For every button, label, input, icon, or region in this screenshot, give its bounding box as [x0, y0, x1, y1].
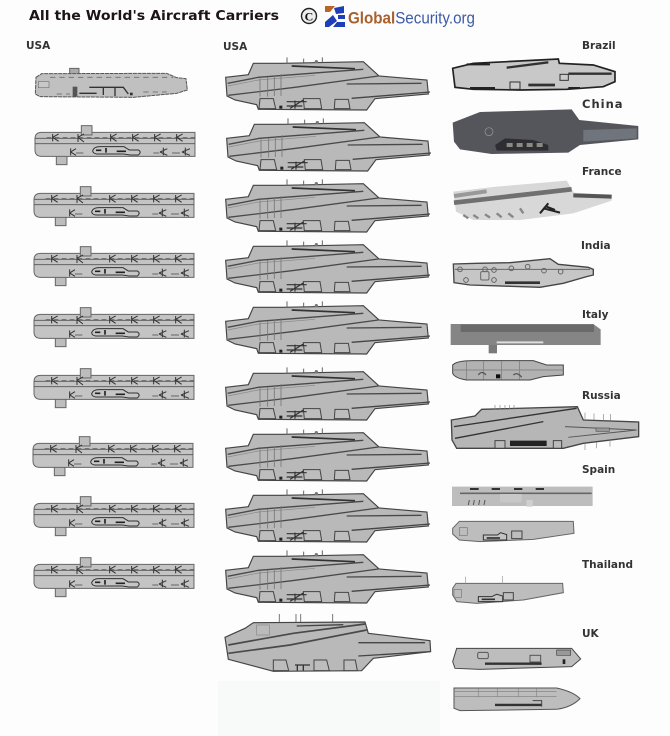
country label: France: France [582, 166, 622, 178]
logo wordmark: GlobalSecurity.org [348, 10, 475, 28]
carrier: Brazil [453, 59, 615, 90]
carrier: deck row 5 [34, 308, 194, 347]
carrier: deck row 2 [35, 126, 195, 165]
carrier: deck row 7 [33, 437, 193, 476]
carrier: centre row 1 [226, 57, 430, 110]
carrier: China [453, 109, 638, 154]
carrier: centre row 6 [226, 367, 430, 420]
carrier: Russia [451, 405, 639, 450]
carrier: centre row 3 [226, 179, 430, 232]
carrier: Thailand [453, 576, 563, 603]
carrier: older USA deck [35, 68, 187, 97]
carrier: deck row 9 [34, 558, 194, 597]
carrier: centre row 2 [227, 118, 431, 171]
country label: Spain: Spain [582, 464, 615, 476]
icon: copyright symbol [302, 8, 316, 24]
carrier: centre row 4 [226, 240, 430, 293]
carrier: UK lower [454, 688, 580, 711]
label: USA centre column: USA [223, 41, 248, 53]
country label: Russia: Russia [582, 390, 621, 402]
carrier: Italy upper [451, 324, 601, 353]
centre column: USA carriers [225, 57, 431, 671]
logo: GlobalSecurity.org [325, 6, 475, 28]
carrier: Spain upper [452, 487, 593, 507]
carrier: UK upper [453, 648, 581, 669]
label: USA left column: USA [26, 40, 51, 52]
country label: China: China [582, 97, 624, 111]
icon: logo mark [325, 6, 345, 27]
blank panel under centre column [218, 681, 440, 736]
carrier: India [453, 259, 593, 287]
carrier: Italy lower [453, 361, 563, 380]
country label: UK: UK [582, 628, 600, 640]
carrier: France [453, 181, 612, 220]
country label: Brazil: Brazil [582, 40, 616, 52]
carrier: deck row 3 [34, 187, 194, 226]
country label: India: India [581, 240, 611, 252]
carrier: deck row 8 [34, 497, 194, 536]
carrier: deck row 4 [34, 247, 194, 286]
right column: other navies [451, 40, 639, 711]
carrier: centre row 10 [225, 614, 431, 671]
left column: USA carriers [33, 68, 195, 597]
carrier: deck row 6 [34, 369, 194, 408]
title: All the World's Aircraft Carriers [29, 8, 279, 24]
icon: copyright symbol: C [305, 10, 313, 24]
country label: Thailand: Thailand [582, 559, 633, 571]
carrier: centre row 7 [226, 428, 430, 481]
carrier: centre row 5 [226, 301, 430, 354]
country label: Italy: Italy [582, 309, 609, 321]
carrier: Spain lower [453, 521, 574, 542]
carrier: centre row 8 [226, 489, 430, 542]
carrier: centre row 9 [226, 550, 430, 603]
